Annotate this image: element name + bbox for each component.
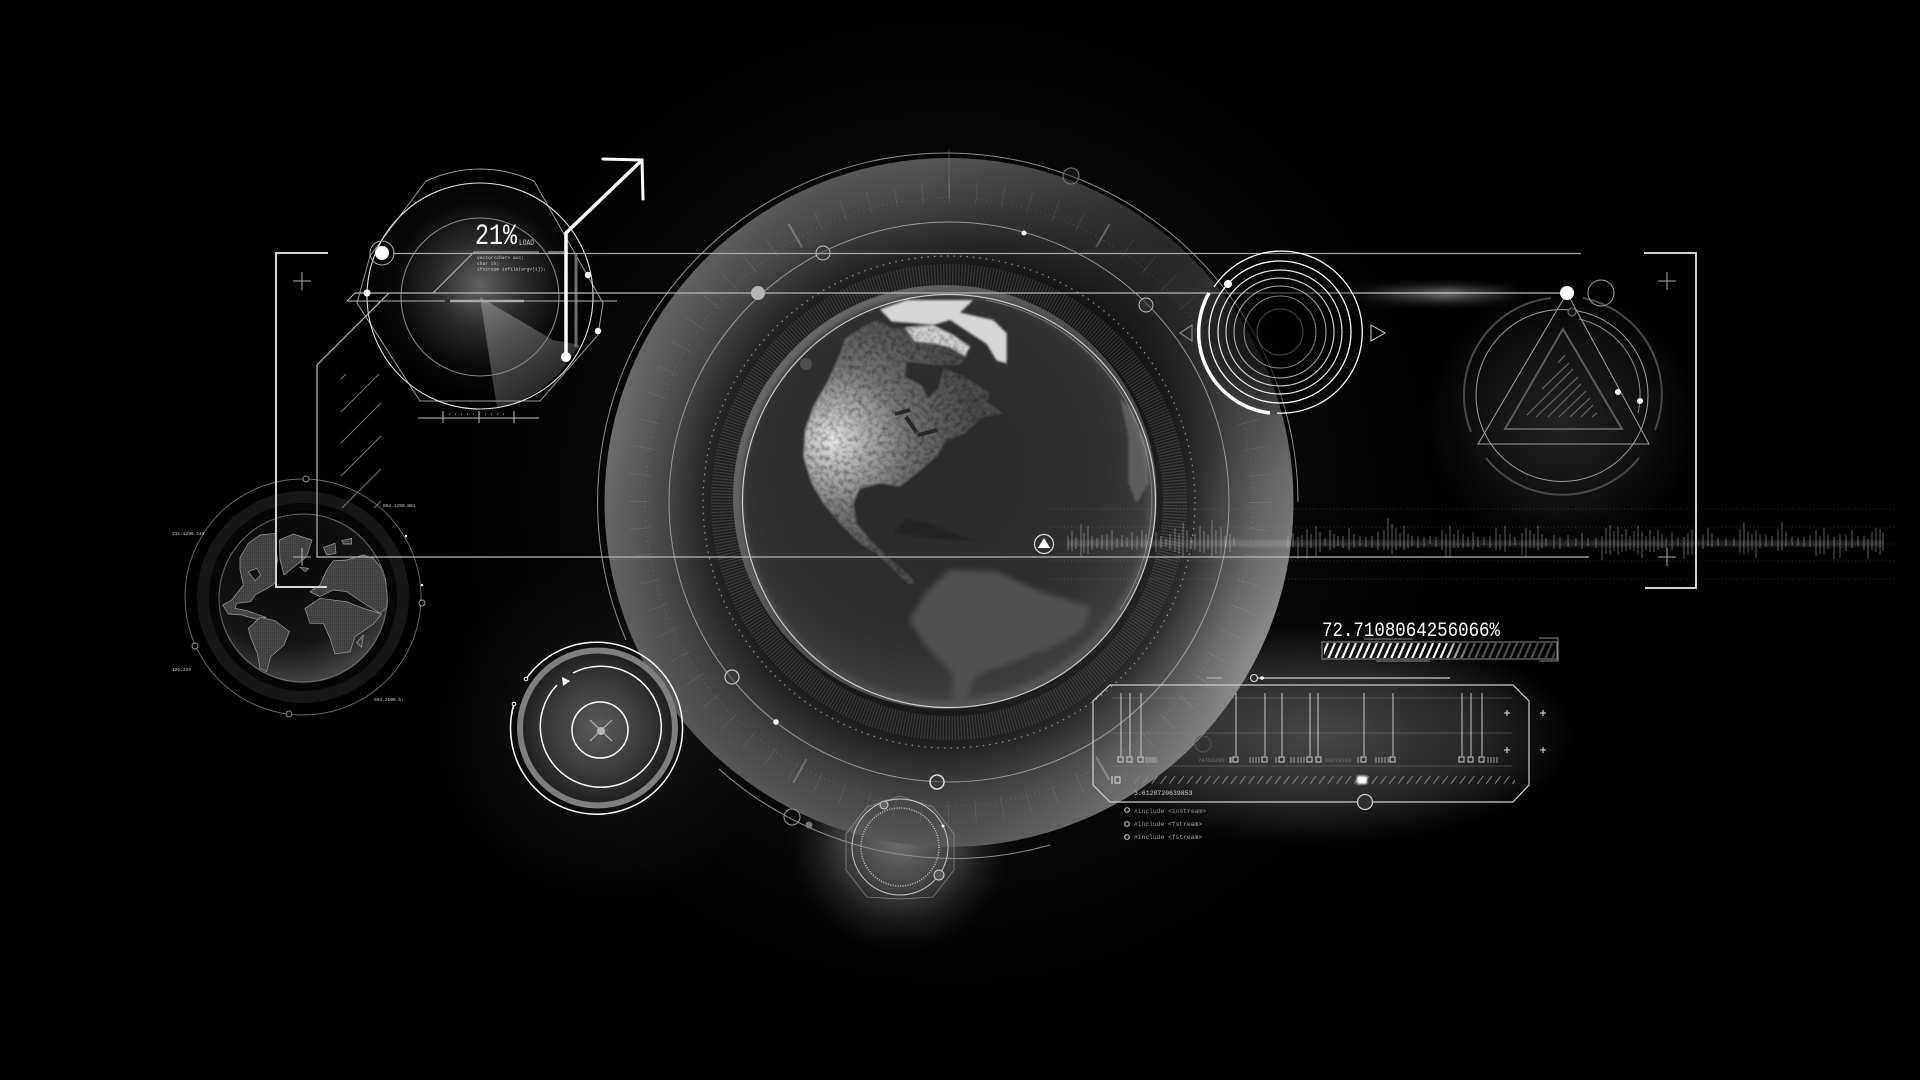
code list: #include <fstream> bbox=[1134, 834, 1202, 841]
waveform bars bbox=[1068, 518, 1883, 560]
hatch marks bbox=[341, 374, 381, 509]
mid ring with nodes bbox=[669, 168, 1229, 828]
globe coordinates bbox=[172, 503, 416, 703]
glow: behind lower gauge bbox=[788, 726, 1012, 950]
arctic islands bbox=[905, 325, 970, 356]
glow: behind target dial bbox=[430, 565, 770, 905]
target fill bbox=[517, 648, 677, 808]
crosshairs bbox=[293, 272, 1676, 566]
code snippet: char ch; bbox=[477, 261, 499, 267]
gauge nodes bbox=[585, 272, 601, 334]
panel: lower small gauge bbox=[846, 796, 954, 899]
earth bbox=[733, 285, 1157, 709]
light streak bbox=[1352, 289, 1524, 299]
track indicator bbox=[1357, 776, 1367, 784]
panel ghost node bbox=[1195, 736, 1211, 752]
code snippet: ifstream infile(argv[1]); bbox=[477, 266, 546, 272]
globe rim bbox=[219, 514, 387, 682]
row numbers: 74756295 bbox=[1198, 757, 1224, 764]
globe coordinates: 431.1290.244 bbox=[172, 531, 205, 537]
scanner rings bbox=[1464, 298, 1662, 495]
panel: data timeline bbox=[1093, 685, 1546, 810]
panel: progress readout bbox=[1322, 620, 1558, 661]
panel: concentric ring dial bbox=[1180, 250, 1385, 414]
globe sphere bbox=[218, 513, 388, 683]
code snippet: vector<char> acc; bbox=[477, 255, 524, 261]
plus markers bbox=[1504, 710, 1546, 753]
glow: behind data panel bbox=[1065, 625, 1575, 845]
cuba and caribbean bbox=[896, 519, 969, 540]
load percentage: 21% bbox=[475, 220, 518, 254]
panel: target dial bbox=[511, 642, 683, 814]
north america bbox=[803, 320, 1003, 585]
lens outer ring bbox=[598, 149, 1298, 858]
globe coordinates: 854.1250.881 bbox=[383, 503, 416, 509]
gauge scale bbox=[418, 411, 539, 423]
dial rings bbox=[1199, 251, 1362, 413]
waveform band bbox=[1050, 509, 1895, 579]
greenland bbox=[880, 300, 1007, 363]
gauge disc bbox=[367, 183, 593, 409]
faint rows bbox=[1112, 698, 1512, 766]
target rings bbox=[511, 642, 683, 814]
globe coordinates: 563.2509.5: bbox=[374, 697, 404, 703]
load label: LOAD bbox=[519, 239, 534, 248]
dial node bbox=[1224, 280, 1232, 288]
earth thin rings bbox=[742, 294, 1156, 708]
vertical markers bbox=[1121, 693, 1482, 756]
code list bbox=[1125, 808, 1206, 841]
arrow bbox=[561, 159, 643, 362]
continents bbox=[803, 300, 1148, 700]
triangle hatching bbox=[1527, 355, 1597, 417]
HUD infographic canvas bbox=[172, 149, 1894, 942]
south america bbox=[909, 570, 1091, 700]
scanner nodes bbox=[1560, 280, 1643, 404]
gauge rings bbox=[357, 169, 603, 409]
dotted ring bbox=[703, 256, 1195, 748]
great lakes bbox=[895, 410, 937, 435]
row numbers bbox=[1198, 757, 1351, 764]
code list: #include <fstream> bbox=[1134, 821, 1202, 828]
waveform centre glow bbox=[1068, 540, 1883, 547]
slider control bbox=[1207, 674, 1450, 682]
code snippet bbox=[477, 255, 546, 272]
dial right arrow bbox=[1371, 325, 1385, 341]
inner triangle bbox=[1505, 329, 1622, 429]
panel: small world globe bbox=[172, 476, 425, 717]
dial dark centre bbox=[1198, 250, 1362, 414]
row numbers: 80678183 bbox=[1325, 757, 1351, 764]
mid and lower rail bbox=[317, 293, 1589, 557]
gauge tracks bbox=[347, 252, 617, 347]
outer triangle bbox=[1478, 293, 1649, 444]
globe coordinates: 126.228 bbox=[172, 667, 191, 673]
barcode ticks bbox=[1146, 757, 1497, 763]
left bracket bbox=[276, 253, 328, 587]
dial left arrow bbox=[1180, 325, 1192, 341]
glow: around lens bbox=[429, 0, 1469, 1022]
scanner glow bbox=[1427, 285, 1697, 555]
striped ring bbox=[723, 276, 1175, 728]
code list: #include <iostream> bbox=[1134, 808, 1206, 815]
panel: triangle scanner bbox=[1427, 280, 1697, 555]
africa limb bbox=[1120, 398, 1148, 503]
lens tick marks bbox=[639, 192, 1259, 812]
panel knob bbox=[1358, 794, 1372, 810]
target end nodes bbox=[512, 677, 528, 706]
progress bar bbox=[1322, 638, 1558, 661]
panel value: 3.6120720639853 bbox=[1134, 790, 1193, 797]
target cross bbox=[590, 720, 612, 741]
dotted guide lines bbox=[1050, 509, 1895, 579]
panel outline bbox=[1093, 685, 1529, 802]
icon: triangle marker bbox=[1034, 534, 1054, 554]
track label icon bbox=[1112, 776, 1120, 784]
hatched track bbox=[1134, 776, 1515, 784]
top rail bbox=[393, 252, 1581, 254]
percentage value: 72.7108064256066% bbox=[1322, 620, 1501, 643]
panel: HUD frame bbox=[276, 253, 1696, 588]
right bracket bbox=[1644, 253, 1696, 588]
earth glass rim bbox=[736, 288, 1154, 706]
marker squares bbox=[1118, 757, 1484, 762]
panel: radar load gauge bbox=[347, 169, 617, 423]
continents bbox=[223, 533, 388, 672]
panel: central lens and globe bbox=[598, 149, 1300, 860]
lens body bbox=[600, 150, 1300, 860]
nodes on frame bbox=[364, 241, 394, 296]
globe orbit ring bbox=[185, 476, 425, 717]
target marker bbox=[562, 677, 570, 686]
radar wedge bbox=[480, 297, 580, 408]
hudson bay bbox=[248, 568, 261, 581]
